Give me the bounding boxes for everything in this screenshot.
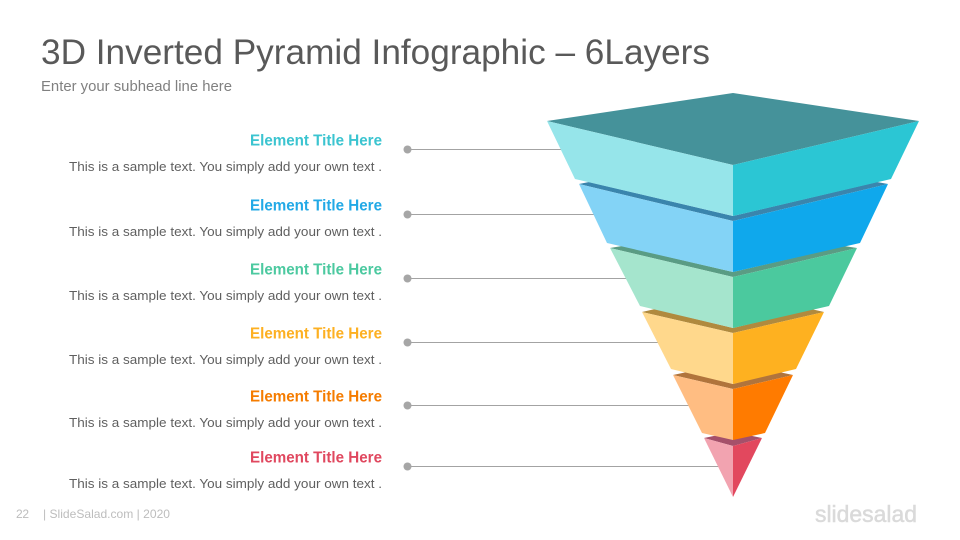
footer: 22 [16, 507, 29, 521]
layer 1 [547, 93, 919, 216]
logo: slidesalad: slidesalad [815, 501, 917, 527]
text block: element 2: Element Title Here [250, 198, 382, 214]
connector 3 [404, 274, 628, 282]
connector 2 [404, 210, 596, 218]
connector 6 [404, 462, 720, 470]
inverted pyramid [547, 93, 919, 497]
text block: element 6 [69, 450, 382, 491]
text block: element 5: Element Title Here [250, 388, 382, 406]
text block: element 1 [69, 132, 382, 174]
text block: element 3: This is a sample text. You simply add your own text . [69, 288, 382, 303]
layer 6 [704, 432, 762, 497]
text block: element 4: This is a sample text. You simply add your own text . [69, 352, 382, 367]
footer: | SlideSalad.com | 2020 [43, 507, 170, 521]
connector 4 [404, 338, 660, 346]
layer 4 [642, 309, 824, 384]
layer 5 [673, 372, 793, 440]
text block: element 3 [69, 262, 382, 303]
title: 3D Inverted Pyramid Infographic – 6Layers [41, 33, 710, 72]
text block: element 6: This is a sample text. You simply add your own text . [69, 476, 382, 491]
layer 3 [610, 246, 857, 328]
layer 2 [579, 182, 888, 272]
text block: element 2: This is a sample text. You simply add your own text . [69, 224, 382, 239]
subhead: Enter your subhead line here [41, 78, 232, 95]
text block: element 5: This is a sample text. You simply add your own text . [69, 415, 382, 430]
text block: element 1: This is a sample text. You simply add your own text . [69, 159, 382, 174]
text block: element 1: Element Title Here [250, 132, 382, 150]
text block: element 4 [69, 326, 382, 367]
text block: element 5 [69, 388, 382, 430]
text block: element 4: Element Title Here [250, 326, 382, 342]
text block: element 3: Element Title Here [250, 262, 382, 278]
text block: element 6: Element Title Here [250, 450, 382, 466]
connector 1 [404, 146, 565, 154]
text block: element 2 [69, 198, 382, 239]
connector 5 [404, 402, 690, 410]
